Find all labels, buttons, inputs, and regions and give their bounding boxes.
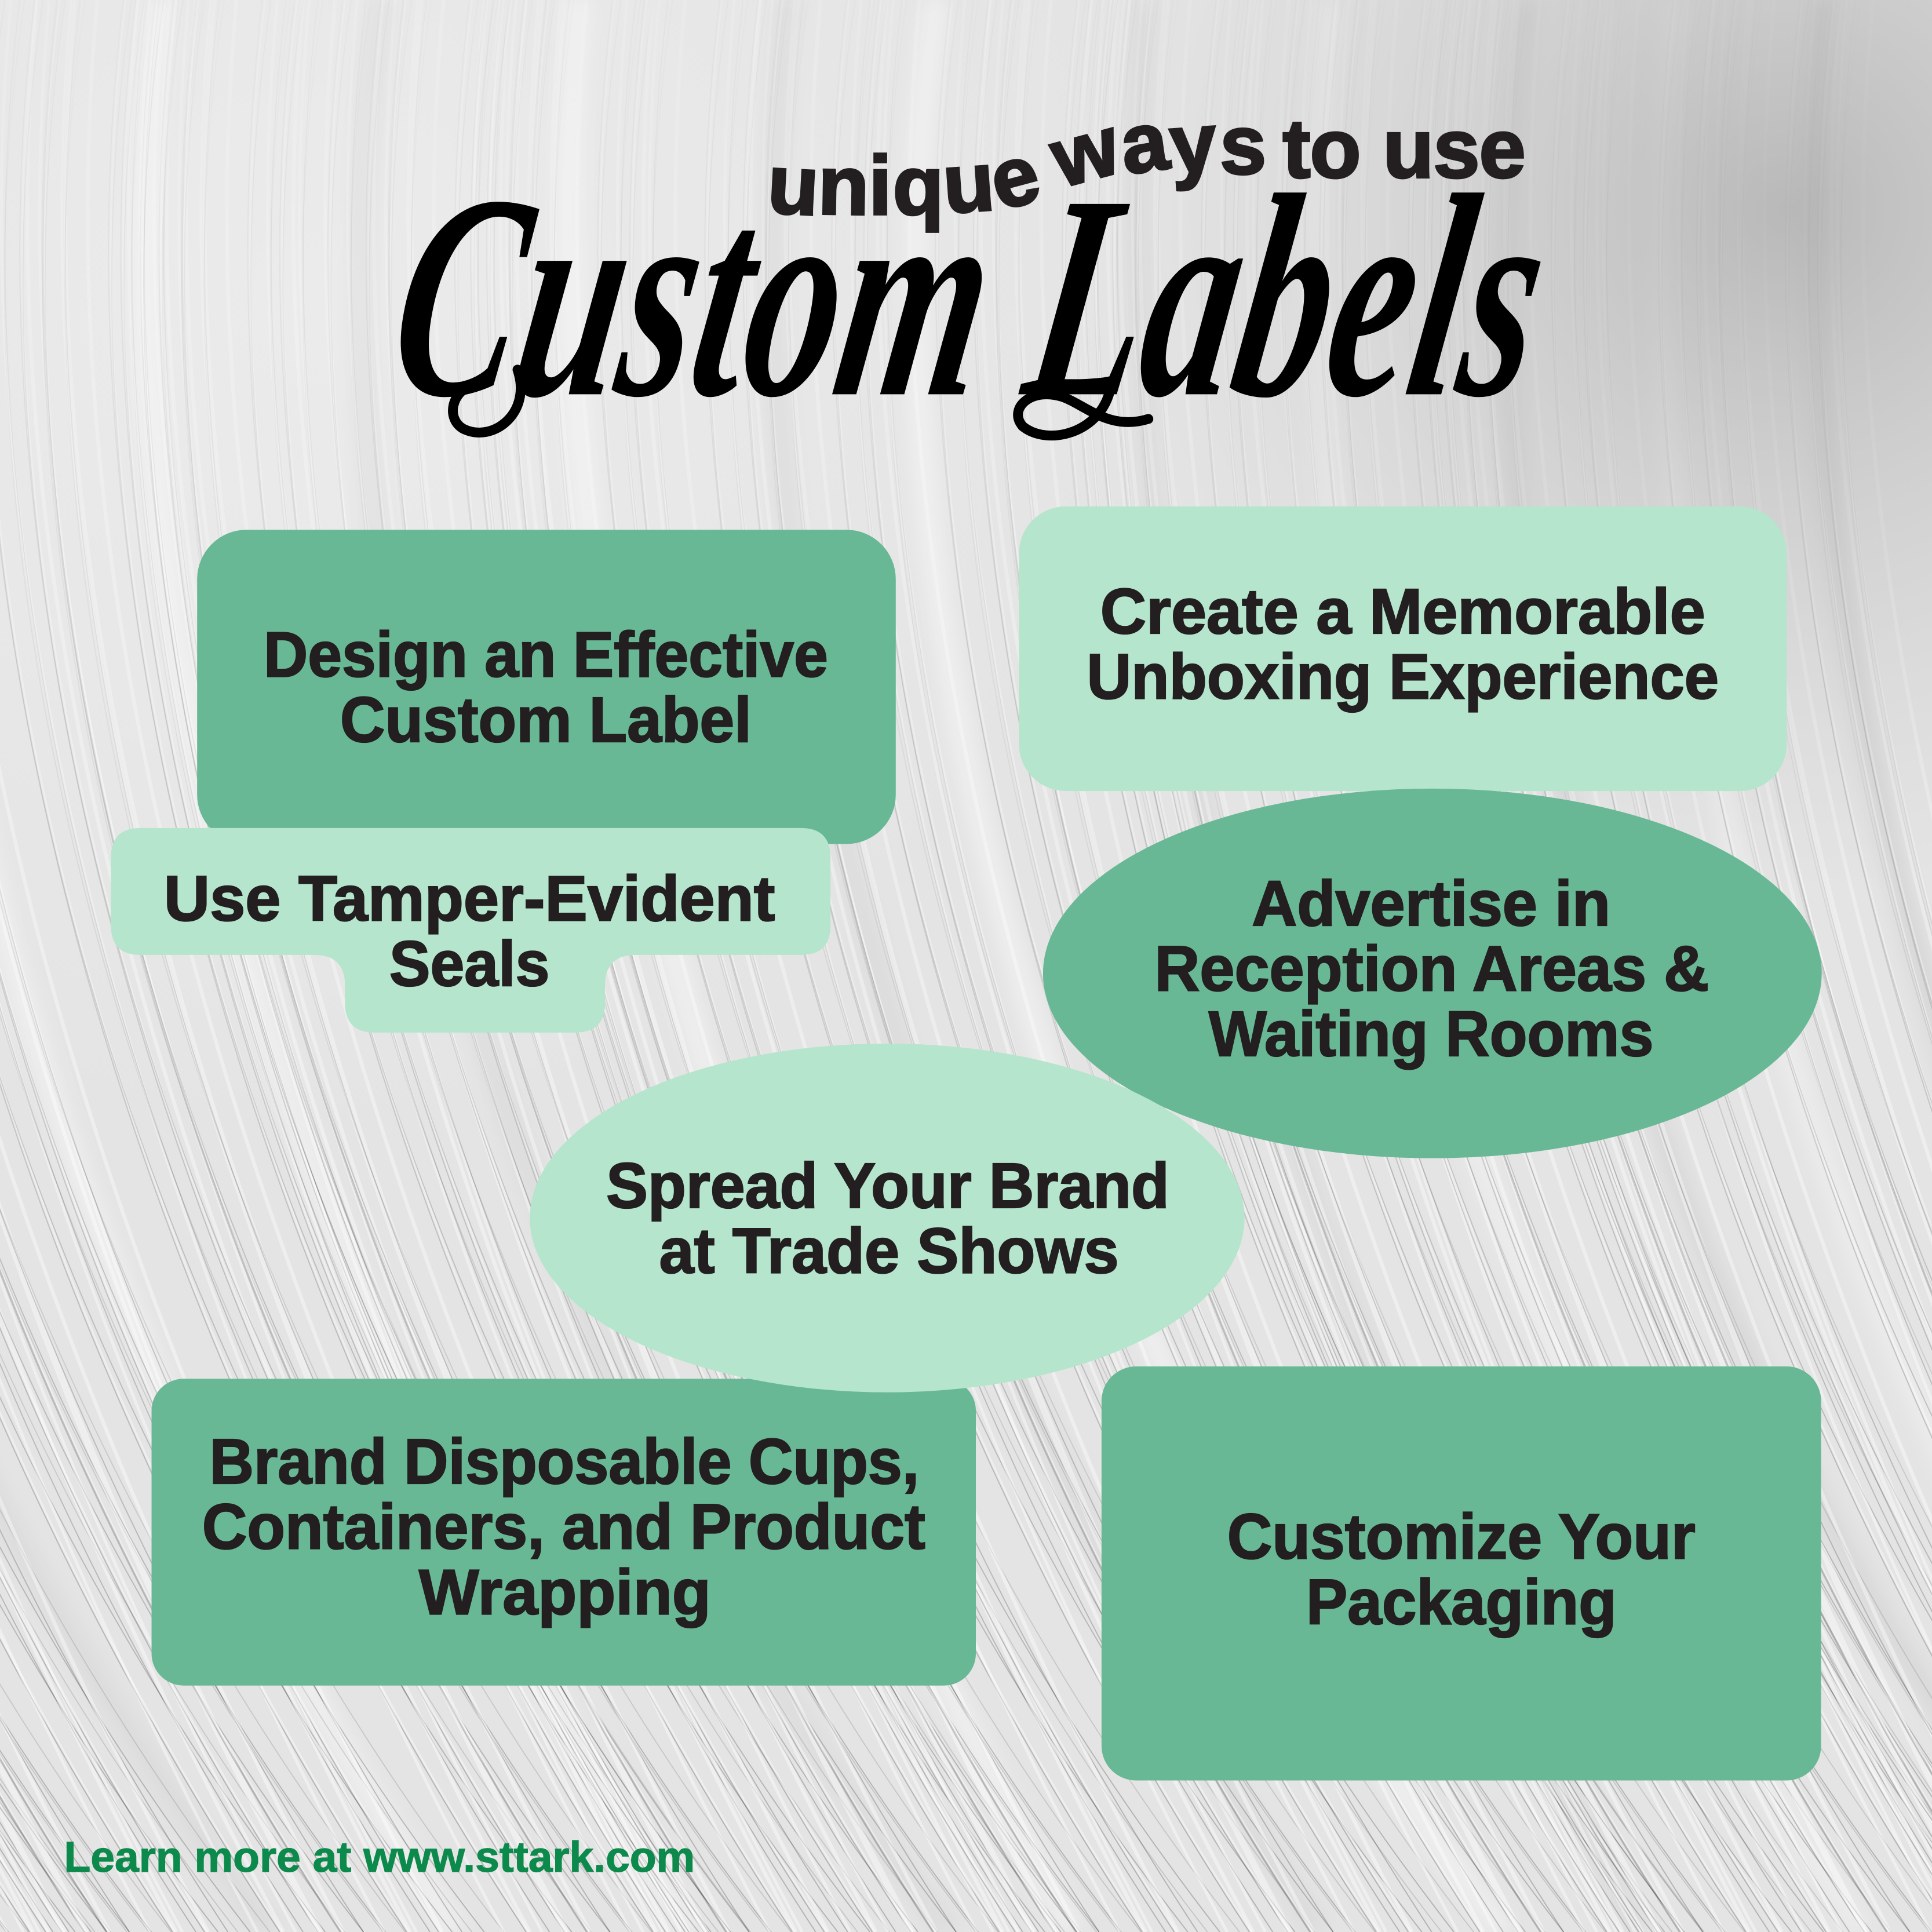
panel: brand disposable cups, containers, and product wrapping: Brand Disposable Cups, [209,1426,919,1497]
panel: advertise in reception areas and waiting rooms [1043,789,1822,1158]
title kicker: unique ways to use: s [1220,98,1266,192]
title kicker: unique ways to use: u [765,137,822,233]
panel: design an effective custom label: Design an Effective [264,619,828,690]
panel: spread your brand at trade shows: Spread Your Brand [606,1150,1169,1222]
panel: spread your brand at trade shows [530,1044,1245,1393]
title kicker: unique ways to use: i [869,138,892,232]
title kicker: unique ways to use: n [817,138,870,232]
panel: brand disposable cups, containers, and product wrapping [152,1379,976,1686]
panel: customize your packaging: Customize Your [1227,1501,1696,1573]
title kicker: unique ways to use: w [1041,97,1129,205]
title kicker: unique ways to use: e [980,125,1049,228]
panel: design an effective custom label [197,530,896,844]
title [374,93,1566,458]
title kicker: unique ways to use: u [940,134,997,231]
panel: create a memorable unboxing experience [1019,506,1787,791]
panel: design an effective custom label: Custom Label [340,684,752,756]
panel: advertise in reception areas and waiting rooms: Advertise in [1252,868,1610,939]
footer link text: Learn more at www.sttark.com [64,1833,695,1881]
title kicker: unique ways to use: y [1167,95,1219,192]
panel: brand disposable cups, containers, and product wrapping: Containers, and Product [202,1492,925,1563]
panel: use tamper-evident seals: Use Tamper-Evident [164,863,775,934]
title kicker: unique ways to use: q [892,138,944,232]
panel: customize your packaging: Packaging [1306,1566,1617,1638]
title kicker: unique ways to use: a [1114,93,1175,192]
panel: use tamper-evident seals [111,828,830,1033]
title kicker: unique ways to use: to use [1282,101,1525,195]
panel: customize your packaging [1102,1366,1821,1780]
panel: advertise in reception areas and waiting rooms: Reception Areas & [1154,934,1709,1005]
title kicker: unique ways to use [765,93,1525,233]
panel: advertise in reception areas and waiting rooms: Waiting Rooms [1209,998,1653,1070]
panel: spread your brand at trade shows: at Trade Shows [659,1215,1119,1286]
panel: use tamper-evident seals: Seals [389,928,549,1000]
panel: create a memorable unboxing experience: Create a Memorable [1100,576,1705,647]
panel: brand disposable cups, containers, and product wrapping: Wrapping [419,1556,711,1628]
panel: create a memorable unboxing experience: Unboxing Experience [1087,641,1719,713]
title flourishes [453,370,1149,436]
